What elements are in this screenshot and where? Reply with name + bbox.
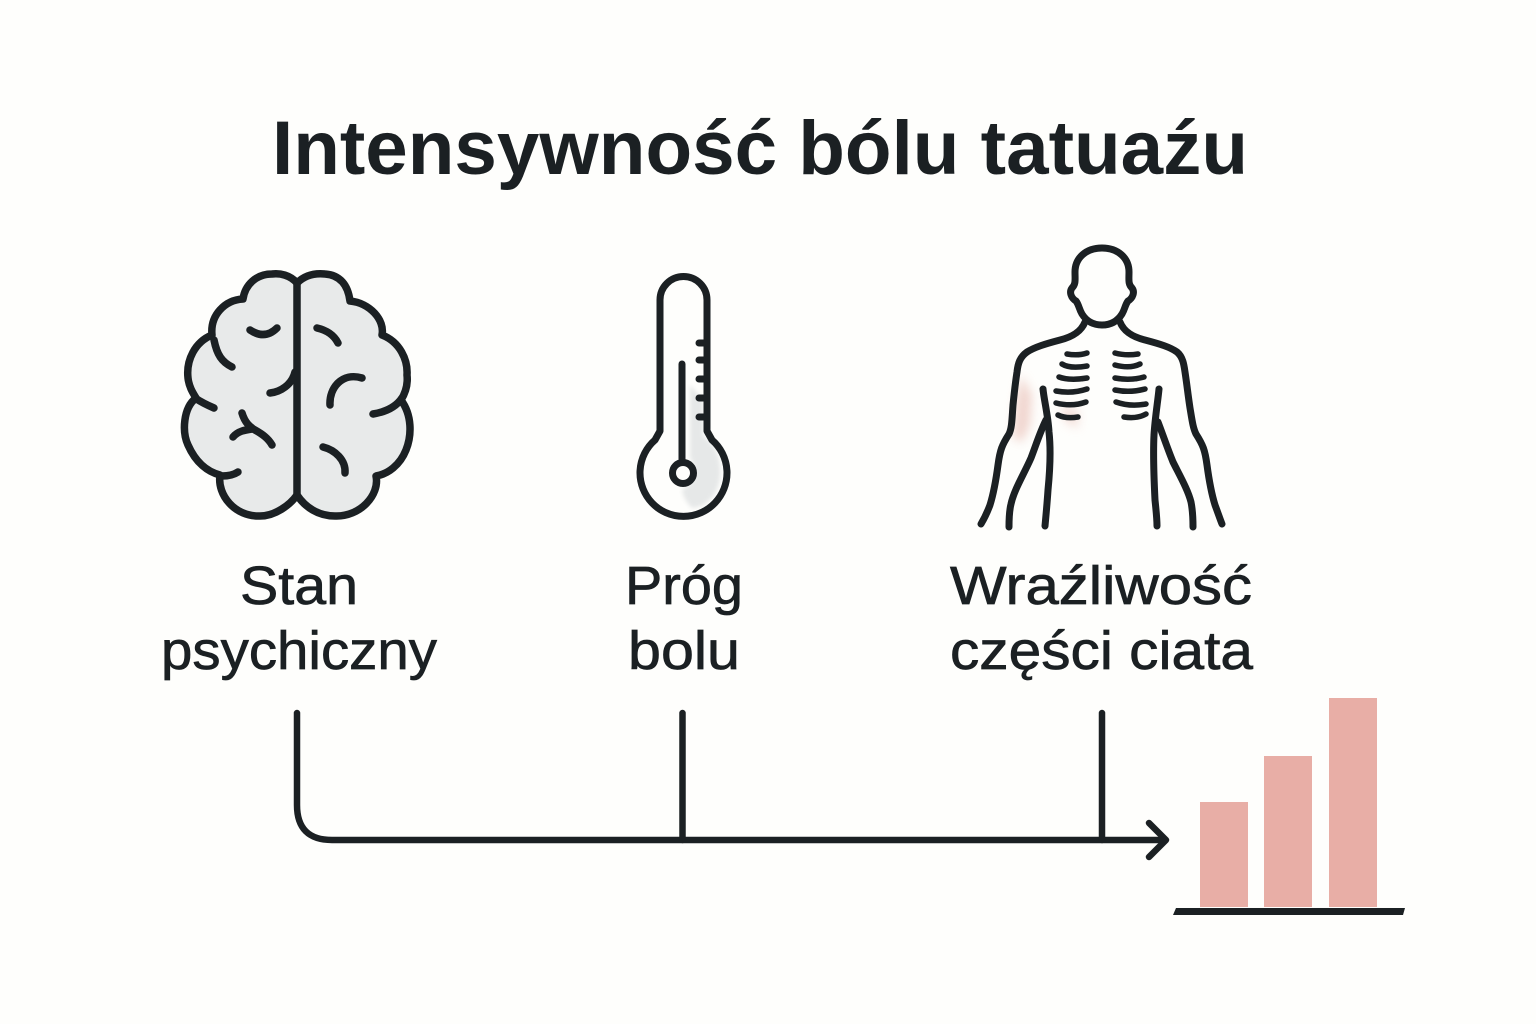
icon: thermometer	[640, 276, 727, 516]
icon: brain	[184, 274, 410, 516]
title: Intensywność bólu tatuaźu	[272, 106, 1248, 191]
label: Wraźliwość części ciata	[950, 556, 1254, 681]
label: Stan psychiczny: psychiczny	[161, 621, 437, 681]
arrow: factors converge to intensity	[297, 713, 1166, 857]
label: Wraźliwość części ciata: części ciata	[950, 621, 1254, 681]
ribs	[1056, 353, 1146, 418]
label: Próg bolu: bolu	[628, 621, 740, 681]
icon: human torso	[981, 248, 1222, 527]
label: Wraźliwość części ciata: Wraźliwość	[950, 556, 1252, 616]
label: Stan psychiczny: Stan	[240, 556, 358, 616]
bar chart: rising pain intensity	[1173, 698, 1405, 915]
label: Próg bolu	[625, 556, 743, 681]
label: Stan psychiczny	[161, 556, 437, 681]
label: Próg bolu: Próg	[625, 556, 743, 616]
